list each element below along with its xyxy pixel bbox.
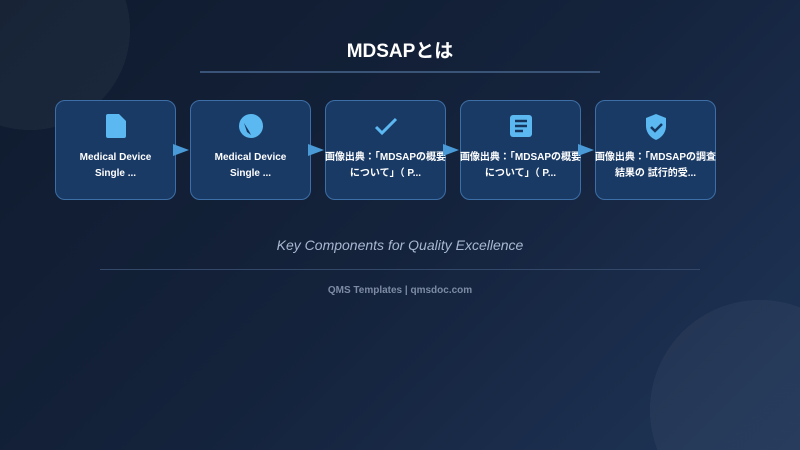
card 5 bbox=[595, 100, 716, 200]
arrow 3 bbox=[443, 144, 459, 156]
icon: check bbox=[375, 118, 397, 135]
card 4 bbox=[460, 100, 581, 200]
card 1: Single ... bbox=[95, 168, 136, 179]
decorative circle top-left bbox=[0, 0, 130, 130]
card 1: Medical Device bbox=[80, 152, 151, 163]
arrow 4 bbox=[578, 144, 594, 156]
card 5: 結果の 試行的受... bbox=[615, 168, 696, 179]
card 2: Medical Device bbox=[215, 152, 286, 163]
icon: document bbox=[106, 114, 126, 138]
card 2: Single ... bbox=[230, 168, 271, 179]
icon: shield check bbox=[646, 114, 666, 140]
icon: list document bbox=[510, 115, 532, 137]
card 5: 画像出典：「MDSAPの調査 bbox=[595, 152, 716, 163]
card 2 bbox=[190, 100, 311, 200]
card 3: 画像出典：「MDSAPの概要 bbox=[325, 152, 446, 163]
card 4: について」（ P... bbox=[485, 168, 556, 179]
decorative circle bottom-right bbox=[650, 300, 800, 450]
card 4: 画像出典：「MDSAPの概要 bbox=[460, 152, 581, 163]
arrow 2 bbox=[308, 144, 324, 156]
card 3: について」（ P... bbox=[350, 168, 421, 179]
subtitle: Key Components for Quality Excellence bbox=[277, 237, 523, 253]
title: MDSAPとは bbox=[347, 41, 453, 62]
arrow 1 bbox=[173, 144, 189, 156]
card 1 bbox=[55, 100, 176, 200]
footer: QMS Templates | qmsdoc.com bbox=[328, 285, 472, 296]
icon: globe bbox=[239, 114, 263, 138]
card 3 bbox=[325, 100, 446, 200]
